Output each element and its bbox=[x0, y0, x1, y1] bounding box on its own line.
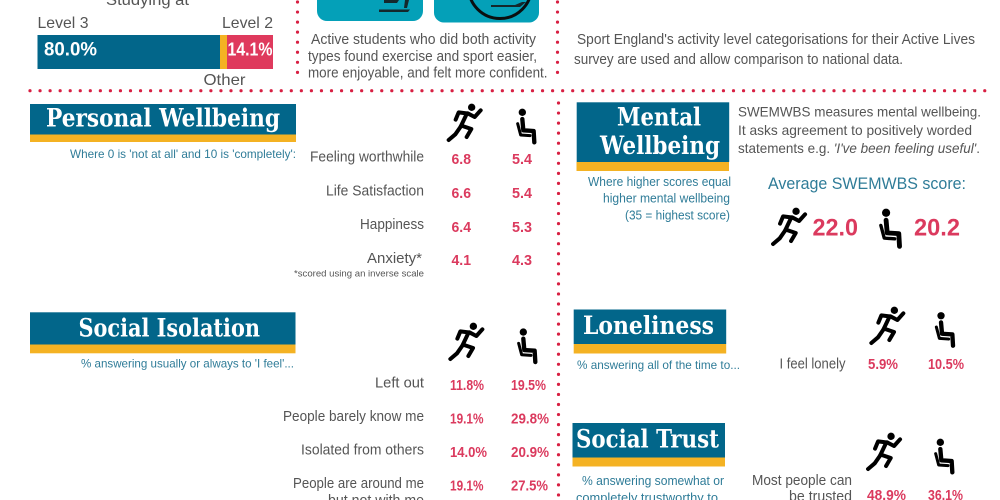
top-left: studying level chart: Other bbox=[204, 72, 246, 89]
heading: personal wellbeing bbox=[30, 104, 296, 142]
caption: loneliness question: % answering all of the time to... bbox=[577, 358, 740, 372]
icon: active runner bbox=[450, 323, 482, 359]
table: personal wellbeing scores: 6.4 bbox=[452, 220, 471, 236]
text: active students note: types found exercise and sport easier, bbox=[308, 49, 537, 65]
top-left: studying level chart: 14.1% bbox=[228, 40, 272, 60]
text: active students note: more enjoyable, and felt more confident. bbox=[308, 66, 548, 82]
heading: social trust: Social Trust bbox=[576, 424, 719, 454]
table: personal wellbeing scores: 6.6 bbox=[452, 186, 471, 202]
icon: active runner bbox=[871, 307, 903, 343]
icon: inactive sitter bbox=[881, 209, 900, 246]
table: personal wellbeing scores: 5.4 bbox=[512, 152, 532, 168]
top-left: studying level chart: 80.0% bbox=[44, 40, 97, 60]
text: Sport England note: survey are used and allow comparison to national data. bbox=[574, 52, 903, 68]
heading: mental wellbeing: Wellbeing bbox=[599, 131, 720, 160]
heading: social isolation bbox=[30, 312, 296, 353]
table: personal wellbeing scores: *scored using an inverse scale bbox=[294, 269, 424, 280]
text: Sport England note: Sport England's activity level categorisations for their Active Lives bbox=[577, 32, 975, 48]
heading: loneliness bbox=[574, 310, 726, 354]
table: social trust percentages bbox=[752, 473, 963, 500]
heading: loneliness: Loneliness bbox=[583, 311, 714, 340]
table: personal wellbeing scores: 5.3 bbox=[512, 220, 532, 236]
heading: mental wellbeing: Mental bbox=[617, 103, 701, 132]
table: social isolation percentages: People barely know me bbox=[283, 409, 424, 425]
panel: mental wellbeing bbox=[576, 102, 981, 246]
table: social isolation percentages: 19.5% bbox=[511, 378, 546, 394]
table: personal wellbeing scores: 5.4 bbox=[512, 186, 532, 202]
top-left: studying level chart bbox=[38, 0, 273, 89]
heading: social isolation: Social Isolation bbox=[78, 314, 260, 343]
table: personal wellbeing scores: Feeling worthwhile bbox=[310, 150, 424, 166]
table: social isolation percentages: 19.1% bbox=[450, 479, 484, 495]
icon: inactive sitter bbox=[519, 328, 535, 362]
caption: mental wellbeing scale: (35 = highest score) bbox=[625, 208, 730, 222]
table: social isolation percentages: 19.1% bbox=[450, 411, 484, 427]
caption: personal wellbeing scale: Where 0 is 'not at all' and 10 is 'completely': bbox=[70, 147, 296, 161]
panel: activity type icons bbox=[317, 0, 539, 23]
subheading: average score: Average SWEMWBS score: bbox=[768, 174, 966, 193]
table: social isolation percentages: People are around me bbox=[293, 476, 424, 492]
text: Sport England note bbox=[574, 32, 975, 68]
caption: social trust question bbox=[576, 474, 724, 500]
icon: inactive sitter bbox=[936, 439, 952, 472]
table: social isolation percentages: Left out bbox=[375, 376, 424, 392]
table: personal wellbeing scores: 4.1 bbox=[452, 253, 471, 269]
text: active students note: Active students who did both activity bbox=[311, 32, 537, 48]
icon: inactive sitter bbox=[936, 312, 953, 346]
table: personal wellbeing scores: Anxiety* bbox=[367, 251, 422, 267]
table: social isolation percentages: 20.9% bbox=[511, 445, 549, 461]
value: inactive score: 20.2 bbox=[914, 215, 960, 242]
caption: mental wellbeing scale: Where higher scores equal bbox=[588, 175, 731, 189]
icon: active runner bbox=[868, 433, 900, 469]
icon: active runner bbox=[773, 208, 805, 244]
top-left: studying level chart: Level 2 bbox=[222, 15, 273, 32]
table: personal wellbeing scores: 6.8 bbox=[452, 152, 471, 168]
icon: inactive sitter bbox=[518, 109, 534, 142]
caption: mental wellbeing scale: higher mental wellbeing bbox=[603, 192, 730, 206]
heading: personal wellbeing: Personal Wellbeing bbox=[46, 104, 280, 133]
panel: personal wellbeing bbox=[30, 104, 534, 280]
table: social isolation percentages: 27.5% bbox=[511, 479, 548, 495]
table: personal wellbeing scores: Happiness bbox=[360, 217, 424, 233]
panel: social trust bbox=[572, 423, 963, 500]
table: loneliness percentages: I feel lonely bbox=[780, 356, 846, 372]
icon: active runner bbox=[449, 104, 481, 140]
table: social trust percentages: Most people can bbox=[752, 473, 852, 489]
table: social isolation percentages: 11.8% bbox=[450, 378, 484, 394]
table: social isolation percentages bbox=[283, 376, 549, 500]
top-left: studying level chart: Level 3 bbox=[38, 15, 89, 32]
caption: social isolation question: % answering usually or always to 'I feel'... bbox=[81, 357, 294, 371]
table: loneliness percentages bbox=[780, 356, 964, 373]
caption: mental wellbeing scale bbox=[588, 175, 731, 222]
table: social isolation percentages: 14.0% bbox=[450, 445, 487, 461]
panel: loneliness bbox=[574, 307, 964, 373]
heading: mental wellbeing bbox=[576, 102, 729, 171]
heading: social trust bbox=[572, 423, 725, 466]
table: personal wellbeing scores: 4.3 bbox=[512, 253, 532, 269]
table: social isolation percentages: Isolated from others bbox=[301, 442, 424, 458]
caption: social trust question: % answering somewhat or bbox=[582, 474, 724, 488]
table: personal wellbeing scores bbox=[294, 150, 532, 280]
table: loneliness percentages: 5.9% bbox=[868, 357, 898, 373]
table: loneliness percentages: 10.5% bbox=[928, 357, 964, 373]
value: active score: 22.0 bbox=[812, 215, 858, 242]
text: SWEMWBS description: statements e.g. 'I've been feeling useful'. bbox=[738, 140, 980, 156]
text: active students note bbox=[308, 32, 548, 82]
text: SWEMWBS description: It asks agreement to positively worded bbox=[738, 122, 972, 138]
panel: social isolation bbox=[30, 312, 549, 500]
table: social isolation percentages: 29.8% bbox=[511, 411, 549, 427]
text: SWEMWBS description bbox=[738, 104, 981, 156]
text: SWEMWBS description: SWEMWBS measures mental wellbeing. bbox=[738, 104, 981, 120]
table: personal wellbeing scores: Life Satisfaction bbox=[326, 184, 424, 200]
